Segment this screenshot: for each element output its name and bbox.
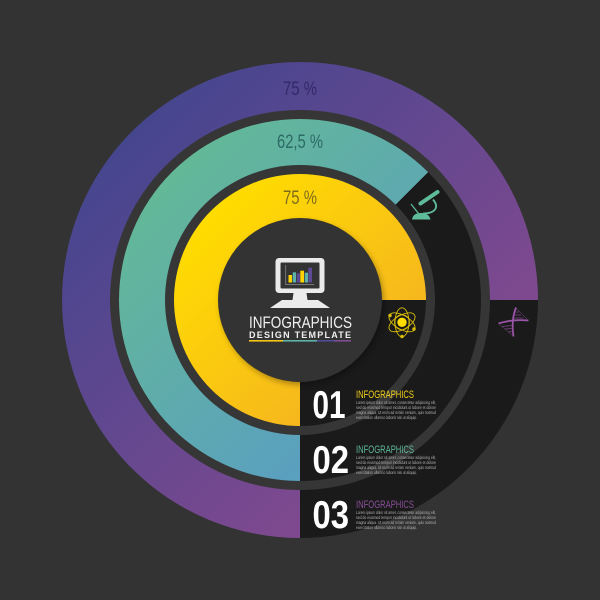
step 03: number and text: INFOGRAPHICS: [356, 499, 414, 511]
step 01: number and text: exercitation ullamco laboris nisi ut aliquip.: [356, 415, 417, 420]
step 03: number and text: exercitation ullamco laboris nisi ut aliquip.: [356, 525, 417, 530]
outer ring: purple 75%: [62, 62, 538, 538]
step 02: number and text: sed do eiusmod tempor incididunt ut labore et dolore: [356, 460, 436, 465]
percent label: middle ring: 62,5 %: [277, 132, 323, 153]
step 03: number and text: 03: [312, 494, 349, 537]
step 03: number and text: sed do eiusmod tempor incididunt ut labore et dolore: [356, 515, 436, 520]
inner ring: yellow 75%: [174, 174, 426, 426]
step 02: number and text: magna aliqua. Ut enim ad minim veniam, quis nostrud: [356, 465, 436, 470]
step 02: number and text: Lorem ipsum dolor sit amet, consectetur adipiscing elit,: [356, 455, 436, 460]
step 03: number and text: magna aliqua. Ut enim ad minim veniam, quis nostrud: [356, 520, 436, 525]
percent label: outer ring: 75 %: [283, 79, 317, 100]
gap ring between outer and middle: [110, 110, 490, 490]
step 01: number and text: Lorem ipsum dolor sit amet, consectetur adipiscing elit,: [356, 400, 436, 405]
center title: INFOGRAPHICS: [249, 314, 352, 332]
step 03: number and text: Lorem ipsum dolor sit amet, consectetur adipiscing elit,: [356, 510, 436, 515]
step 02: number and text: exercitation ullamco laboris nisi ut aliquip.: [356, 470, 417, 475]
center disc: [218, 218, 382, 382]
step 01: number and text: magna aliqua. Ut enim ad minim veniam, quis nostrud: [356, 410, 436, 415]
step 01: number and text: sed do eiusmod tempor incididunt ut labore et dolore: [356, 405, 436, 410]
percent label: inner ring: 75 %: [283, 188, 317, 209]
step 02: number and text: 02: [312, 439, 349, 482]
step 02: number and text: INFOGRAPHICS: [356, 444, 414, 456]
gap ring between middle and inner: [165, 165, 435, 435]
center title: DESIGN TEMPLATE: [249, 330, 351, 340]
step 01: number and text: 01: [312, 384, 346, 427]
step 01: number and text: INFOGRAPHICS: [356, 389, 414, 401]
middle ring: teal 62.5%: [119, 119, 481, 481]
